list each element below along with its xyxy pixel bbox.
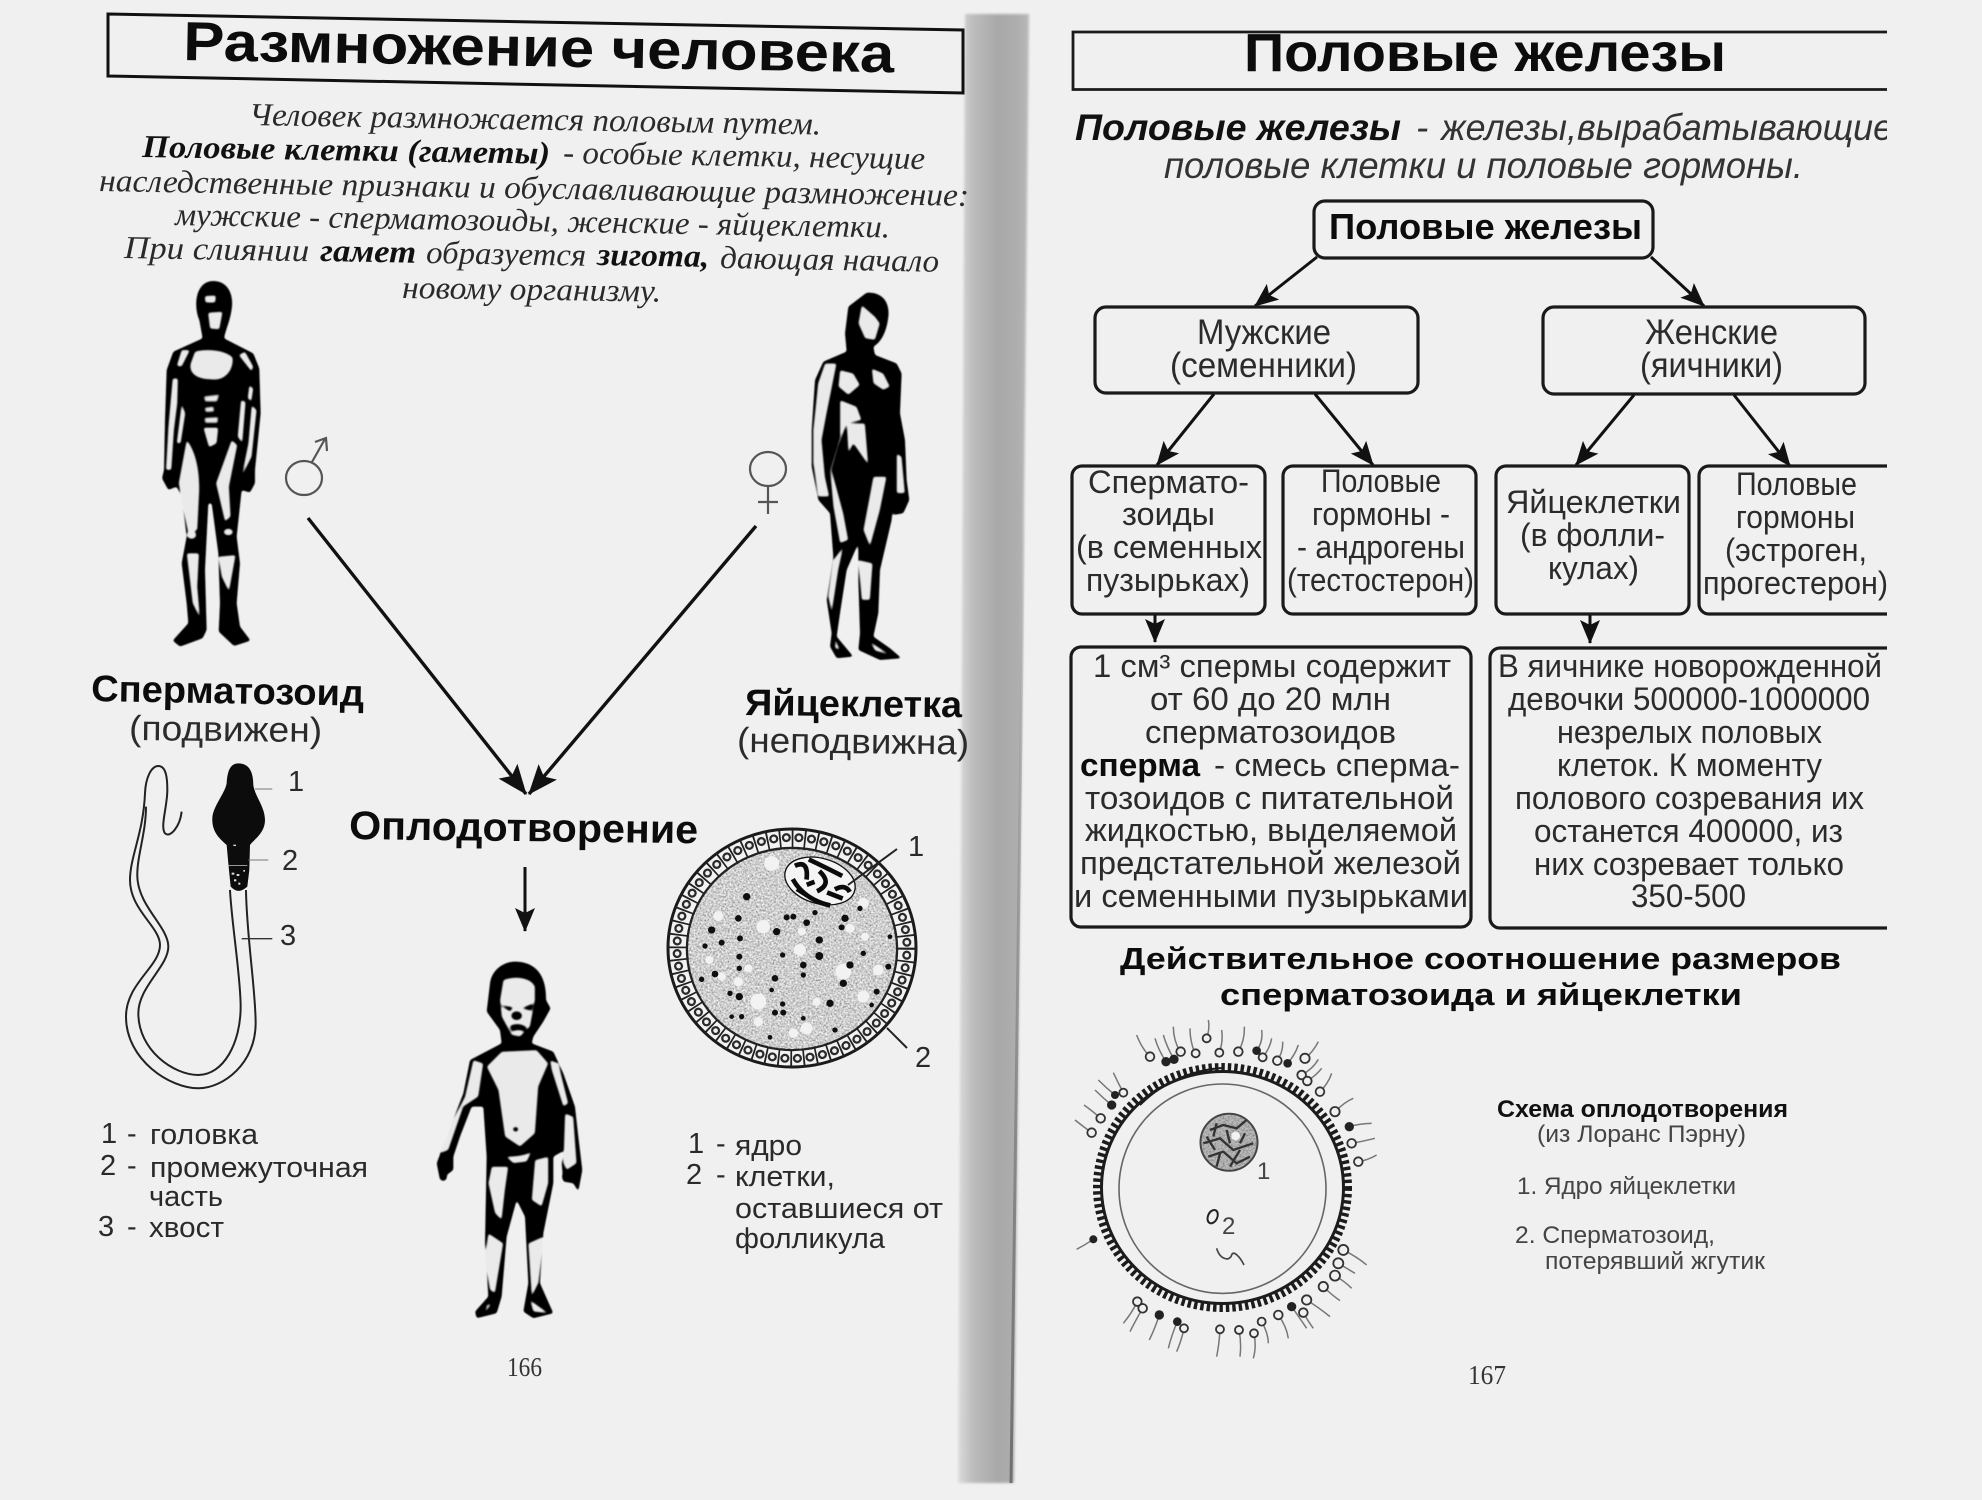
- diagram: fertilization scheme: 1: [1257, 1158, 1270, 1185]
- diagram: fertilization scheme: [1075, 1020, 1377, 1358]
- fact box: sperm: [1071, 647, 1471, 927]
- page number 166: 166: [507, 1352, 542, 1382]
- flow box: egg cells: [1496, 466, 1689, 614]
- intro text: При слиянии: [123, 229, 309, 268]
- arrow: root to male: [1255, 257, 1317, 306]
- flow box: female hormones: гормоны: [1736, 499, 1855, 535]
- arrow: fertilization to child: [524, 867, 526, 931]
- intro text: дающая начало: [720, 239, 939, 279]
- flow box: androgens: - андрогены: [1297, 529, 1465, 565]
- caption: fertilization scheme: Схема оплодотворения: [1497, 1096, 1788, 1123]
- arrow: man to fertilization: [308, 518, 526, 794]
- flow box: female glands: [1543, 307, 1865, 394]
- icon: female symbol: [750, 452, 786, 514]
- legend: sperm parts: -: [127, 1211, 137, 1243]
- heading: size ratio: Действительное соотношение размеров: [1120, 941, 1841, 976]
- intro text: Половые клетки (гаметы): [141, 128, 550, 171]
- intro text: - особые клетки, несущие: [563, 134, 925, 176]
- flow box: androgens: Половые: [1321, 463, 1441, 499]
- flow box: female hormones: (эстроген,: [1725, 532, 1867, 568]
- flow box: androgens: [1283, 463, 1476, 614]
- flow box: sperm cells: Спермато-: [1088, 464, 1249, 500]
- flow box: sperm cells: зоиды: [1122, 496, 1215, 532]
- flow box: Половые железы: Половые железы: [1329, 206, 1642, 247]
- flow box: Половые железы: [1314, 201, 1653, 258]
- diagram: sperm cell: 2: [282, 845, 298, 877]
- definition text: -: [1416, 107, 1428, 148]
- label: Яйцеклетка: [737, 682, 969, 762]
- flow box: female hormones: прогестерон): [1703, 565, 1888, 601]
- flow box: female glands: (яичники): [1640, 346, 1783, 385]
- caption: fertilization scheme: потерявший жгутик: [1545, 1248, 1766, 1275]
- title box: Размножение человека: Размножение человека: [183, 10, 895, 84]
- title box: Размножение человека: [108, 10, 963, 93]
- label: Сперматозоид: Сперматозоид: [91, 668, 365, 714]
- flow box: egg cells: Яйцеклетки: [1506, 484, 1681, 520]
- fact box: eggs: полового созревания их: [1515, 780, 1864, 816]
- fact box: sperm: и семенными пузырьками: [1074, 878, 1468, 914]
- icon: male symbol: [286, 438, 327, 495]
- arrow: female to hormones: [1734, 395, 1790, 466]
- book gutter shadow: [958, 14, 1029, 1483]
- flow box: female glands: Женские: [1645, 313, 1778, 352]
- fact box: eggs: [1490, 648, 1920, 928]
- flow box: androgens: гормоны -: [1312, 496, 1450, 532]
- flow box: egg cells: кулах): [1548, 550, 1639, 586]
- fact box: sperm: тозоидов с питательной: [1085, 780, 1454, 816]
- flow box: male glands: Мужские: [1197, 313, 1331, 352]
- fact box: sperm: 1 см³ спермы содержит: [1093, 648, 1451, 684]
- intro text: образуется: [426, 234, 586, 273]
- legend: sperm parts: [98, 1118, 368, 1244]
- caption: fertilization scheme: 1. Ядро яйцеклетки: [1517, 1173, 1736, 1200]
- title box: Половые железы: Половые железы: [1244, 23, 1726, 83]
- diagram: sperm cell: 3: [280, 920, 296, 952]
- arrow: female to eggs: [1576, 395, 1634, 465]
- legend: sperm parts: -: [127, 1150, 137, 1182]
- flow box: sperm cells: [1072, 464, 1265, 614]
- legend: sperm parts: 2: [100, 1150, 116, 1182]
- arrow: root to female: [1651, 257, 1704, 306]
- legend: sperm parts: часть: [149, 1181, 223, 1213]
- intro text: мужские - сперматозоиды, женские - яйцеклетки.: [174, 196, 890, 244]
- flow box: female hormones: Половые: [1736, 466, 1857, 502]
- legend: egg parts: -: [716, 1159, 726, 1191]
- legend: sperm parts: головка: [150, 1119, 259, 1151]
- page number 167: 167: [1468, 1360, 1506, 1390]
- heading: size ratio: сперматозоида и яйцеклетки: [1220, 977, 1742, 1012]
- fact box: sperm: сперма: [1080, 747, 1200, 783]
- fact box: sperm: - смесь сперма-: [1214, 747, 1460, 783]
- legend: sperm parts: 1: [101, 1118, 117, 1150]
- flow box: egg cells: (в фолли-: [1520, 517, 1665, 553]
- fact box: sperm: сперматозоидов: [1145, 714, 1396, 750]
- arrow: eggs to facts: [1588, 615, 1592, 643]
- legend: egg parts: [686, 1128, 943, 1255]
- legend: sperm parts: промежуточная: [150, 1152, 368, 1184]
- heading: size ratio: [1120, 941, 1841, 1012]
- flow box: sperm cells: (в семенных: [1076, 529, 1262, 565]
- label: Яйцеклетка: (неподвижна): [737, 721, 969, 762]
- intro text: наследственные признаки и обуславливающие размножение:: [99, 162, 969, 213]
- heading: Оплодотворение: Оплодотворение: [349, 804, 698, 852]
- legend: egg parts: ядро: [735, 1130, 802, 1162]
- fact box: eggs: незрелых половых: [1557, 714, 1822, 750]
- fact box: sperm: жидкостью, выделяемой: [1085, 812, 1457, 848]
- flow box: male glands: [1095, 307, 1418, 393]
- caption: fertilization scheme: 2. Сперматозоид,: [1515, 1222, 1715, 1249]
- legend: egg parts: -: [716, 1128, 726, 1160]
- fact box: sperm: от 60 до 20 млн: [1150, 681, 1391, 717]
- caption: fertilization scheme: [1497, 1096, 1788, 1275]
- intro text: новому организму.: [402, 269, 661, 309]
- legend: egg parts: фолликула: [735, 1223, 886, 1255]
- fact box: eggs: В яичнике новорожденной: [1498, 648, 1882, 684]
- panel: right page: [1071, 23, 1920, 1390]
- intro text: гамет: [320, 232, 416, 270]
- arrow: woman to fertilization: [529, 526, 756, 794]
- label: Сперматозоид: (подвижен): [129, 709, 322, 750]
- legend: egg parts: оставшиеся от: [735, 1193, 943, 1225]
- fact box: eggs: девочки 500000-1000000: [1508, 681, 1870, 717]
- legend: egg parts: клетки,: [735, 1161, 835, 1193]
- arrow: male to androgens: [1315, 394, 1373, 465]
- legend: sperm parts: 3: [98, 1211, 114, 1243]
- label: Сперматозоид: [91, 668, 365, 750]
- definition text: [1075, 107, 1893, 186]
- legend: egg parts: 2: [686, 1159, 702, 1191]
- fact box: eggs: них созревает только: [1534, 846, 1844, 882]
- fact box: sperm: предстательной железой: [1080, 845, 1461, 881]
- diagram: egg cell: 1: [908, 831, 924, 863]
- intro text: [99, 96, 969, 309]
- figure: adult woman: [812, 293, 909, 660]
- definition text: половые клетки и половые гормоны.: [1164, 145, 1803, 186]
- arrow: sperm to facts: [1154, 615, 1156, 642]
- fact box: eggs: клеток. К моменту: [1557, 747, 1822, 783]
- definition text: Половые железы: [1075, 107, 1401, 148]
- legend: sperm parts: хвост: [149, 1212, 224, 1244]
- legend: egg parts: 1: [688, 1128, 704, 1160]
- flow box: sperm cells: пузырьках): [1086, 562, 1250, 598]
- intro text: Человек размножается половым путем.: [249, 96, 821, 141]
- label: Яйцеклетка: Яйцеклетка: [745, 682, 963, 725]
- flow box: androgens: (тестостерон): [1287, 562, 1474, 598]
- definition text: железы,вырабатывающие: [1439, 107, 1893, 148]
- fact box: eggs: останется 400000, из: [1534, 813, 1843, 849]
- fact box: eggs: 350-500: [1631, 878, 1746, 914]
- diagram: egg cell: 2: [915, 1042, 931, 1074]
- caption: fertilization scheme: (из Лоранс Пэрну): [1537, 1121, 1746, 1148]
- panel: left page: [91, 10, 969, 1382]
- figure: child: [437, 962, 582, 1318]
- diagram: sperm cell: [126, 763, 304, 1088]
- diagram: sperm cell: 1: [288, 766, 304, 798]
- diagram: fertilization scheme: 2: [1222, 1213, 1235, 1240]
- figure: adult man: [162, 281, 261, 647]
- intro text: зигота,: [596, 236, 709, 274]
- legend: sperm parts: -: [127, 1118, 137, 1150]
- arrow: male to sperm: [1157, 394, 1214, 465]
- diagram: egg cell: [668, 829, 931, 1074]
- flow box: male glands: (семенники): [1170, 346, 1357, 385]
- flow box: female hormones: [1697, 464, 1887, 616]
- title box: Половые железы: [1072, 30, 1887, 91]
